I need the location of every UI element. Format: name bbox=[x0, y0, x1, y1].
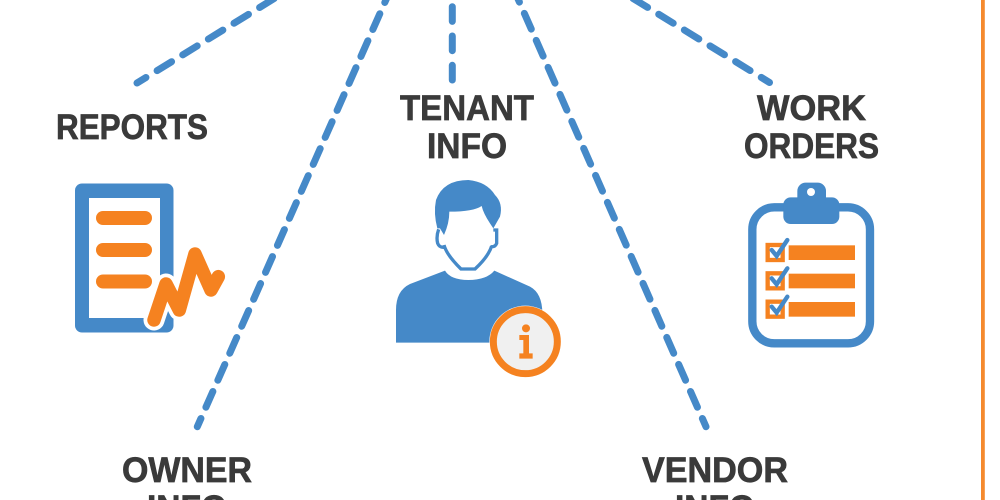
heading: work orders: WORK bbox=[757, 89, 866, 128]
heading: tenant info bbox=[400, 89, 534, 166]
heading: reports: REPORTS bbox=[56, 108, 208, 147]
icon: report document with chart line bbox=[75, 184, 218, 332]
heading: work orders bbox=[744, 89, 879, 166]
orange vertical rule bbox=[981, 0, 985, 500]
icon: person with info badge bbox=[396, 180, 561, 378]
heading: tenant info: TENANT bbox=[400, 89, 534, 128]
dashed connector lines bbox=[137, 0, 770, 427]
heading: work orders: ORDERS bbox=[744, 127, 879, 166]
heading: tenant info: INFO bbox=[427, 127, 507, 166]
heading: owner info: OWNER bbox=[122, 451, 252, 490]
heading: vendor info: VENDOR bbox=[642, 451, 788, 490]
icon: clipboard checklist bbox=[752, 183, 870, 343]
